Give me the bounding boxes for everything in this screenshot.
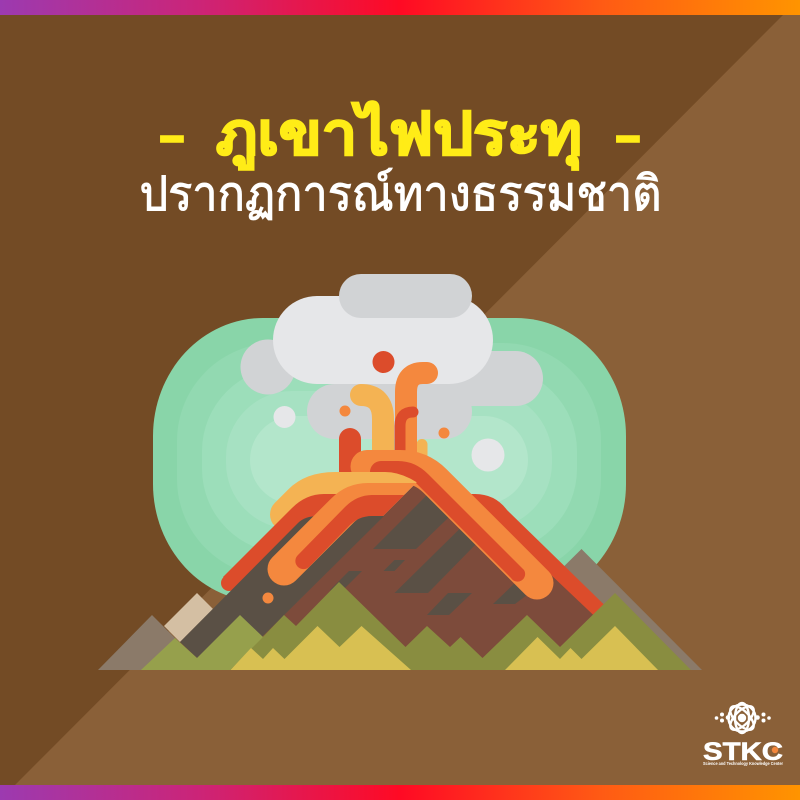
hill: dark olive range xyxy=(230,582,691,670)
bottom gradient bar xyxy=(0,785,800,800)
logo dots xyxy=(715,712,771,722)
jet: orange xyxy=(406,373,427,465)
volcano xyxy=(180,461,625,670)
lava: yellow flow xyxy=(286,488,425,514)
lava: back flow left xyxy=(223,494,405,578)
smoke: lower pill xyxy=(307,384,472,439)
jet: yellow xyxy=(361,395,383,465)
volcano body xyxy=(284,483,625,670)
top gradient bar xyxy=(0,0,800,15)
logo wordmark: STKC xyxy=(703,738,783,766)
lava: upper orange flow xyxy=(367,466,537,583)
lava droplet xyxy=(262,592,274,604)
smoke: top pill xyxy=(339,274,472,318)
title line 1: - xyxy=(613,102,643,167)
hill: yellow left xyxy=(230,626,411,670)
title line 1: - xyxy=(157,102,187,167)
lava: back flow right xyxy=(400,494,625,640)
jet: small yellow xyxy=(416,444,428,470)
foreground hills xyxy=(141,582,691,670)
hill: yellow right xyxy=(505,626,658,670)
jet: red inner xyxy=(400,412,413,465)
smoke: main cloud xyxy=(273,296,493,384)
background mountains xyxy=(98,549,702,670)
smoke: left puff xyxy=(240,340,296,394)
lava: lower orange flow xyxy=(284,500,440,569)
title line 1 xyxy=(157,101,643,171)
title line 1: ภูเขาไฟประทุ xyxy=(216,101,582,171)
title line 2: ปรากฏการณ์ทางธรรมชาติ xyxy=(140,168,662,221)
green glow backdrop xyxy=(153,318,626,602)
lava: upper red flow xyxy=(370,461,525,582)
smoke cloud xyxy=(240,274,543,439)
flying particles xyxy=(274,351,504,472)
hill: light olive xyxy=(141,615,263,670)
jet: red left pillar xyxy=(339,439,361,490)
logo orange dot xyxy=(772,747,778,753)
logo: STKC xyxy=(703,702,783,766)
lava: lower red flow xyxy=(295,495,404,570)
lava jets xyxy=(350,373,427,490)
logo atom icon xyxy=(726,702,758,734)
volcano dark left strip xyxy=(180,516,384,658)
lava: left red band xyxy=(229,522,290,583)
logo tagline: Science and Technology Knowledge Center xyxy=(703,761,783,766)
volcano shadow patches xyxy=(330,495,527,615)
title xyxy=(140,101,662,221)
smoke: right pill xyxy=(420,351,543,406)
